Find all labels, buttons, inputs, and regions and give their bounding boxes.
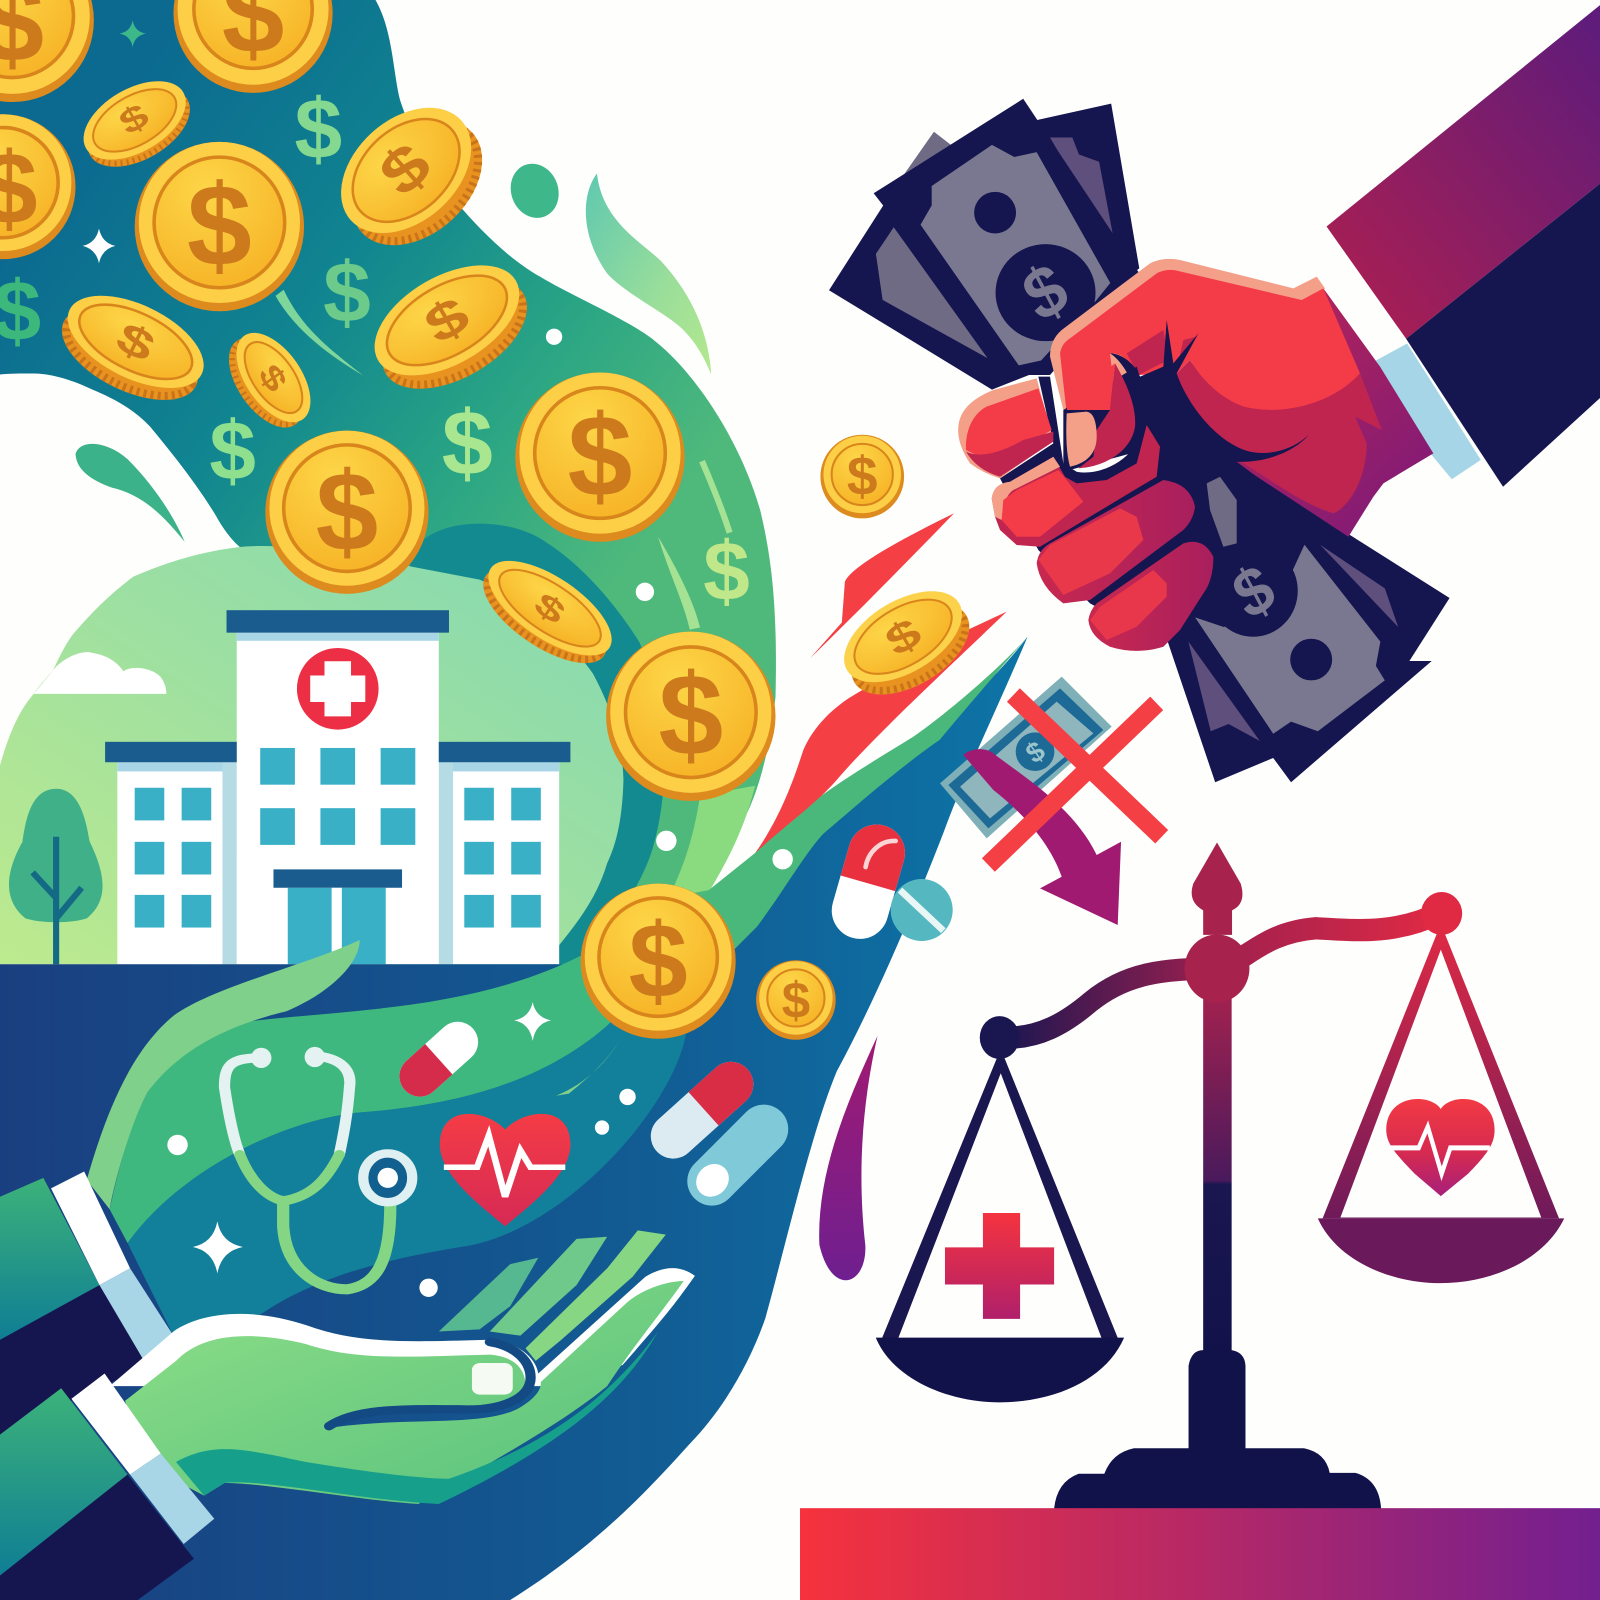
coin: $ [187, 160, 252, 290]
coin [606, 632, 776, 801]
swirl: money stream [0, 0, 776, 969]
pill: red and pale blue [642, 1053, 763, 1168]
coin [173, 0, 333, 93]
coin: $ [847, 445, 878, 507]
tilted coin: $ [877, 609, 929, 665]
coin [0, 0, 94, 102]
fist crease [1000, 320, 1308, 643]
red fist [958, 259, 1433, 651]
banknote sliver [1207, 477, 1237, 547]
hospital [105, 610, 570, 964]
lower sleeve [0, 1374, 214, 1600]
downward arrow [963, 749, 1121, 925]
purple drop [819, 1036, 878, 1280]
coin [820, 435, 904, 518]
coin [515, 372, 685, 542]
tilted coin: $ [415, 286, 479, 355]
right pan [1318, 892, 1564, 1283]
tilted coin [48, 277, 218, 419]
heart with pulse [440, 1114, 570, 1226]
stethoscope [224, 1047, 412, 1289]
tilted coin [829, 572, 985, 713]
coin [135, 142, 304, 311]
leaves [76, 157, 711, 542]
tilted coin [469, 543, 626, 681]
coin [756, 960, 836, 1040]
scale pivot and finial [1185, 842, 1249, 1002]
upper sleeve [0, 1172, 173, 1435]
left pan [876, 1016, 1124, 1402]
lower wave and hands [0, 940, 695, 1600]
tilted coin [356, 243, 545, 411]
balance scale [876, 842, 1564, 1509]
scale pedestal [1054, 1350, 1381, 1509]
fourth finger [1088, 542, 1213, 651]
coin [581, 884, 736, 1039]
green dollar signs: $ [209, 404, 256, 498]
red shard [810, 513, 954, 658]
index finger [958, 378, 1053, 478]
caring hand [110, 1230, 695, 1504]
coin: $ [782, 971, 810, 1028]
cuff [1376, 344, 1481, 479]
pill: red and white capsule [825, 818, 912, 946]
dots and sparkles [83, 229, 793, 1297]
coin: $ [568, 391, 632, 521]
red cross [988, 695, 1162, 865]
green dollar signs: $ [323, 244, 371, 340]
tree [9, 789, 103, 964]
tablet [891, 879, 953, 941]
crossed-out banknote [940, 677, 1112, 838]
crossed-out banknote: $ [1020, 735, 1051, 769]
green dollar signs [0, 81, 750, 618]
pill: blue capsule [677, 1094, 798, 1216]
scale column [1203, 982, 1232, 1357]
lower banknotes: $ [1221, 549, 1286, 634]
tilted coin: $ [112, 96, 155, 142]
coin: $ [316, 448, 378, 574]
teal wave band [128, 999, 686, 1336]
tilted coin [70, 65, 203, 183]
sparkle: green [119, 20, 146, 47]
green dollar signs: $ [442, 392, 493, 494]
leaf-shaped light green stroke [87, 940, 360, 1209]
coin [265, 431, 429, 594]
scale beam [1000, 913, 1440, 1038]
tilted coin [214, 320, 325, 440]
hospital hill background [0, 546, 623, 964]
upper banknotes: $ [1010, 247, 1080, 337]
upper banknotes [829, 99, 1139, 390]
base bar [800, 1508, 1600, 1600]
coin [0, 114, 76, 259]
sleeve [1327, 5, 1600, 487]
green dollar signs: $ [703, 524, 750, 618]
thumb nail [1066, 412, 1097, 467]
tilted coin: $ [109, 312, 163, 371]
tilted coin [317, 83, 507, 270]
pill: small red and white [391, 1013, 487, 1105]
tilted coin: $ [251, 358, 294, 399]
tilted coin: $ [528, 586, 572, 632]
second finger [992, 425, 1160, 547]
coin: $ [658, 650, 723, 780]
lower banknotes [1166, 463, 1450, 782]
red swoosh [755, 612, 1007, 853]
green dollar signs: $ [295, 81, 342, 177]
stream: blue wave with medical items [0, 637, 1028, 1600]
tilted coin: $ [365, 129, 444, 209]
cloud [34, 652, 166, 694]
coin: $ [629, 902, 688, 1020]
third finger [1037, 480, 1195, 603]
green wave band [110, 953, 633, 1243]
stream: green ribbon [531, 637, 1028, 1061]
